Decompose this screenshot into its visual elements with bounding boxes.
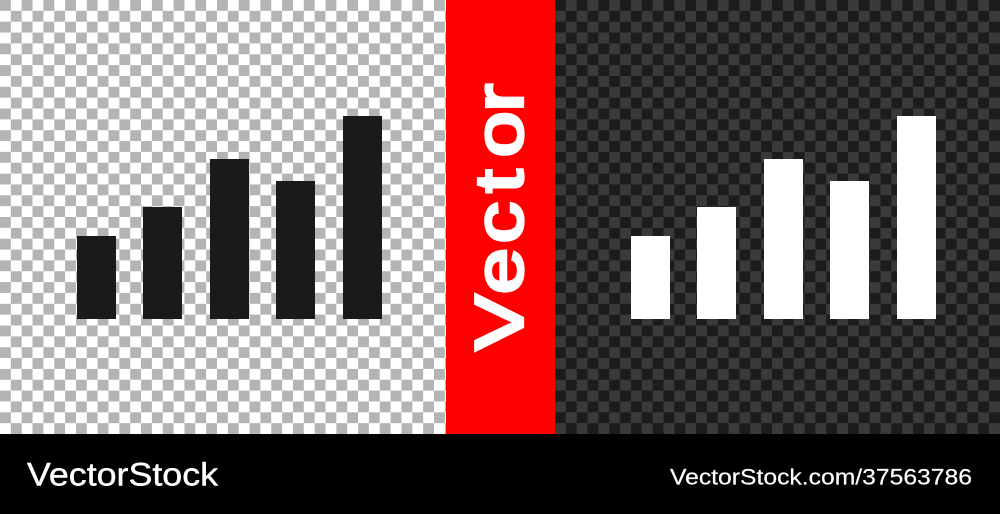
footer logo: VectorStock: VectorStock <box>27 456 219 492</box>
panel: red band <box>446 0 555 434</box>
footer url: VectorStock.com/37563786 <box>670 464 972 490</box>
panel: transparent checker background <box>0 0 446 434</box>
rotated label: Vector: Vector <box>461 84 538 350</box>
footer bar <box>0 434 1000 514</box>
bar chart icon: black on light <box>77 116 382 319</box>
panel: dark checker background <box>555 0 1000 434</box>
bar chart icon: white on dark <box>631 116 936 319</box>
